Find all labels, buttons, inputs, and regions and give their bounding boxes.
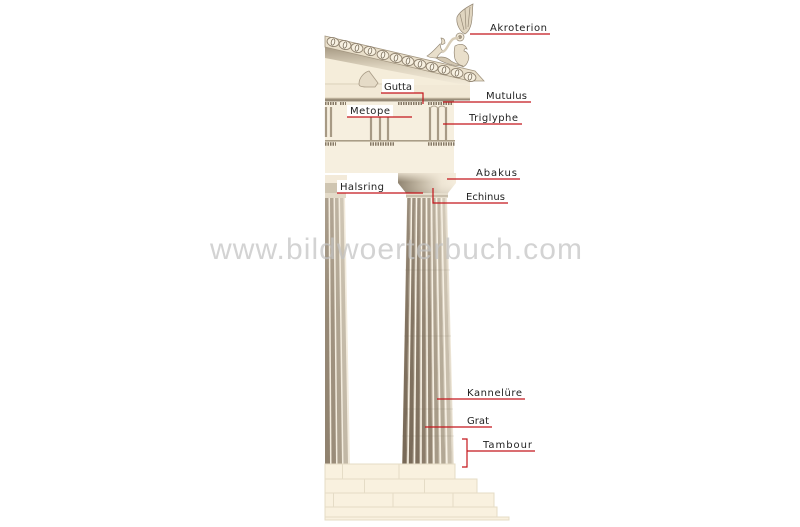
capital: abacus, echinus and necking: [398, 173, 456, 198]
watermark: www.bildwoerterbuch.com: [209, 233, 582, 266]
stepped base: [325, 464, 509, 520]
akroterion ornament: [427, 4, 473, 67]
label: Halsring: Halsring: [340, 182, 384, 193]
label: Gutta: Gutta: [384, 82, 412, 93]
label: Metope: Metope: [350, 106, 390, 117]
label: Akroterion: Akroterion: [490, 23, 547, 34]
label: Triglyphe: [443, 113, 522, 124]
label: Grat: Grat: [467, 416, 489, 427]
label: Kannelüre: [437, 388, 525, 399]
label: Gutta: [381, 79, 423, 104]
label: Metope: [347, 105, 412, 117]
label: Abakus: Abakus: [476, 168, 517, 179]
pediment with raking cornice: [325, 36, 484, 100]
label: Echinus: Echinus: [466, 192, 505, 203]
label: Tambour with bracket: [462, 439, 535, 467]
label: Tambour with bracket: Tambour: [482, 440, 533, 451]
label: Abakus: [447, 168, 520, 179]
entablature: architrave and frieze: [325, 100, 455, 173]
pediment sculpture: [359, 71, 378, 87]
triglyph bars: [326, 107, 446, 140]
label: Grat: [425, 416, 492, 427]
label: Halsring: [337, 180, 423, 193]
guttae rows: [325, 102, 452, 105]
flute ridges: [408, 198, 447, 464]
triglyph arches: [371, 106, 446, 108]
label: Mutulus: [443, 91, 531, 102]
label: Triglyphe: Triglyphe: [468, 113, 518, 124]
central column shaft with flutes: [402, 198, 454, 464]
label: Kannelüre: Kannelüre: [467, 388, 522, 399]
label: Mutulus: Mutulus: [486, 91, 527, 102]
left column: [325, 175, 350, 464]
label: Echinus: [433, 188, 508, 203]
